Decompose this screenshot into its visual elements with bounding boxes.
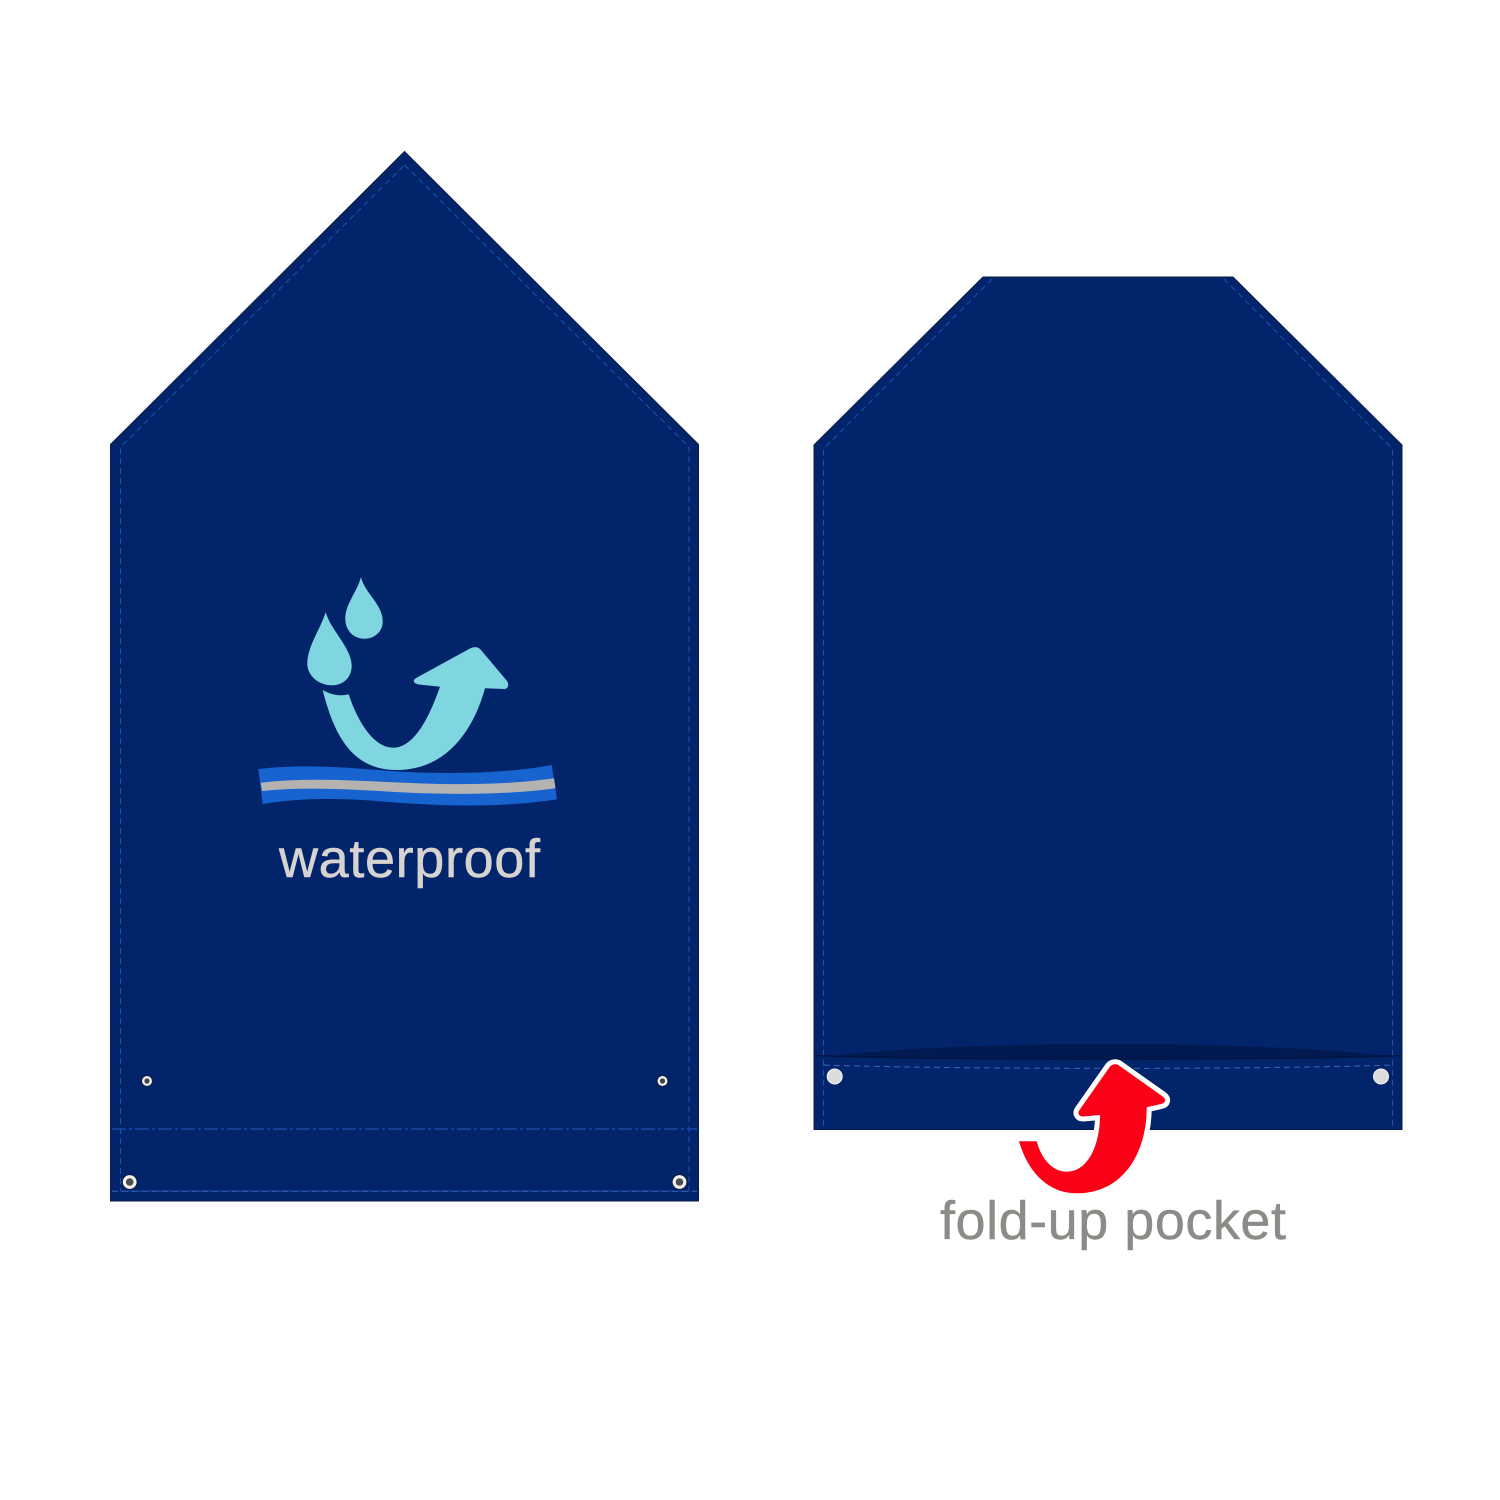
grommet: pocket right [1374,1069,1388,1084]
arrow: red fold-up arrow [1019,1064,1165,1193]
grommet: lower left [122,1175,137,1189]
grommet: upper right [657,1076,668,1086]
panel: back cover with flat top and pocket [814,277,1402,1130]
label: waterproof: waterproof [278,829,541,889]
icon: waterproof symbol [258,577,557,805]
waterproof fabric layers [258,765,557,805]
pocket opening shadow [830,1044,1390,1059]
grommet: upper left [142,1076,152,1086]
label: fold-up pocket: fold-up pocket [940,1191,1286,1251]
grommet: lower right [672,1175,687,1189]
panel: front cover with pointed top [110,152,698,1201]
icon: rebound arrow [323,647,508,770]
icon: lower water drop [307,612,352,685]
grommet: pocket left [827,1069,842,1084]
icon: upper water drop [345,577,383,639]
